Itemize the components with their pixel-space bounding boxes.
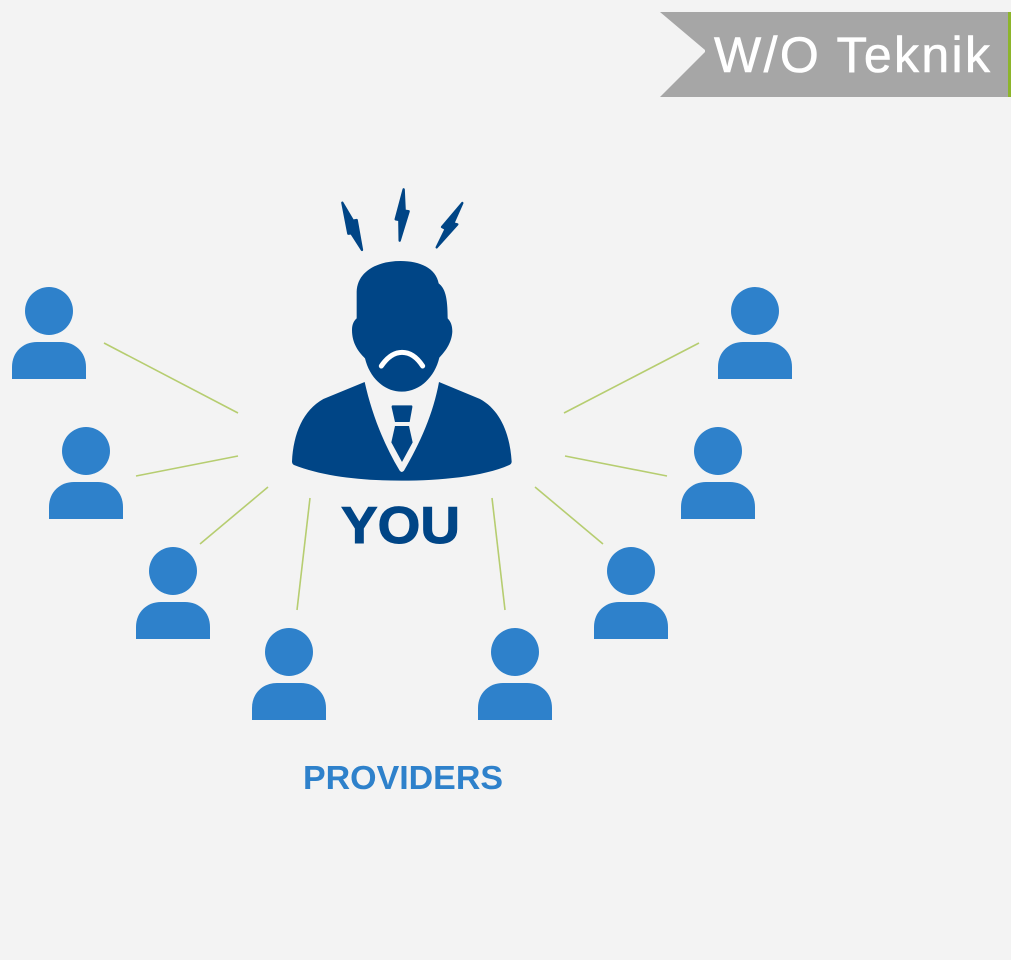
banner ribbon (660, 12, 1011, 97)
label: YOU: YOU (341, 497, 460, 555)
label: PROVIDERS: PROVIDERS (303, 759, 503, 796)
provider 6 (594, 547, 668, 639)
icon: head (352, 261, 452, 392)
provider 2 (49, 427, 123, 519)
connector lines (104, 343, 699, 610)
banner text: W/O Teknik (714, 27, 991, 83)
banner green edge (1008, 12, 1011, 97)
icon: lightning bolts (342, 189, 462, 250)
icon: frown (381, 352, 423, 366)
central stressed person icon (292, 189, 512, 481)
provider 4 (252, 628, 326, 720)
icon: tie (391, 405, 413, 462)
provider 8 (718, 287, 792, 379)
provider 1 (12, 287, 86, 379)
banner: W/O Teknik (660, 12, 1011, 97)
icon: suit (292, 382, 512, 481)
provider 5 (478, 628, 552, 720)
provider 3 (136, 547, 210, 639)
provider icons (12, 287, 792, 720)
provider 7 (681, 427, 755, 519)
